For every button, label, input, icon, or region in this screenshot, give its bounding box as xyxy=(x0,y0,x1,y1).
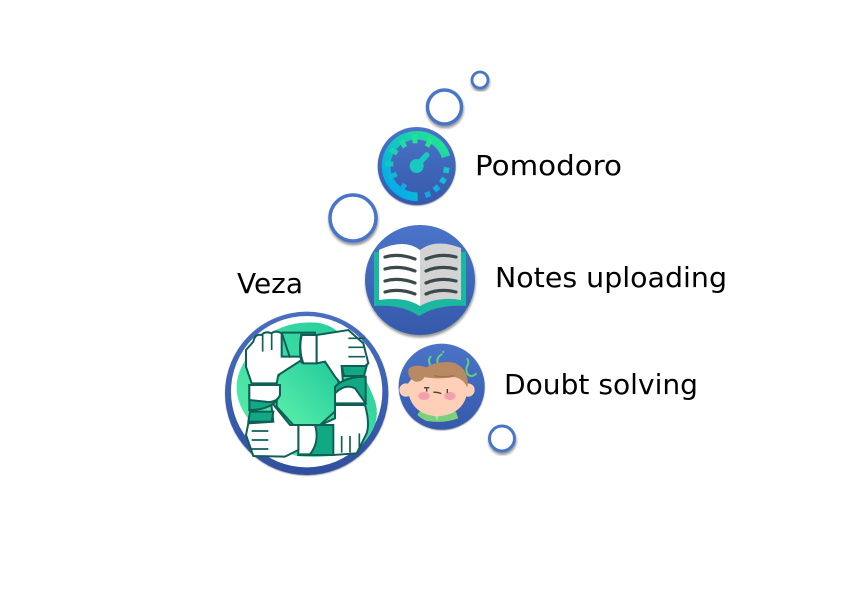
bubble: small top ring xyxy=(472,72,488,88)
bubble: lower ring xyxy=(490,426,514,451)
hand: bottom right xyxy=(313,405,368,455)
hand: top right xyxy=(317,330,368,387)
label: Pomodoro: Pomodoro xyxy=(475,149,622,182)
label: Notes uploading: Notes uploading xyxy=(495,261,727,294)
hand: bottom left xyxy=(246,402,298,457)
bubble: left ring xyxy=(330,195,376,241)
icon: confused boy xyxy=(399,344,485,430)
hand: top left xyxy=(246,332,302,383)
icon: Pomodoro speedometer xyxy=(378,127,456,205)
icon: Veza team of hands xyxy=(225,312,388,475)
bubble: medium top ring xyxy=(428,90,462,124)
label: Veza: Veza xyxy=(237,267,303,300)
label: Doubt solving: Doubt solving xyxy=(504,368,698,401)
icon: open book xyxy=(365,225,475,335)
